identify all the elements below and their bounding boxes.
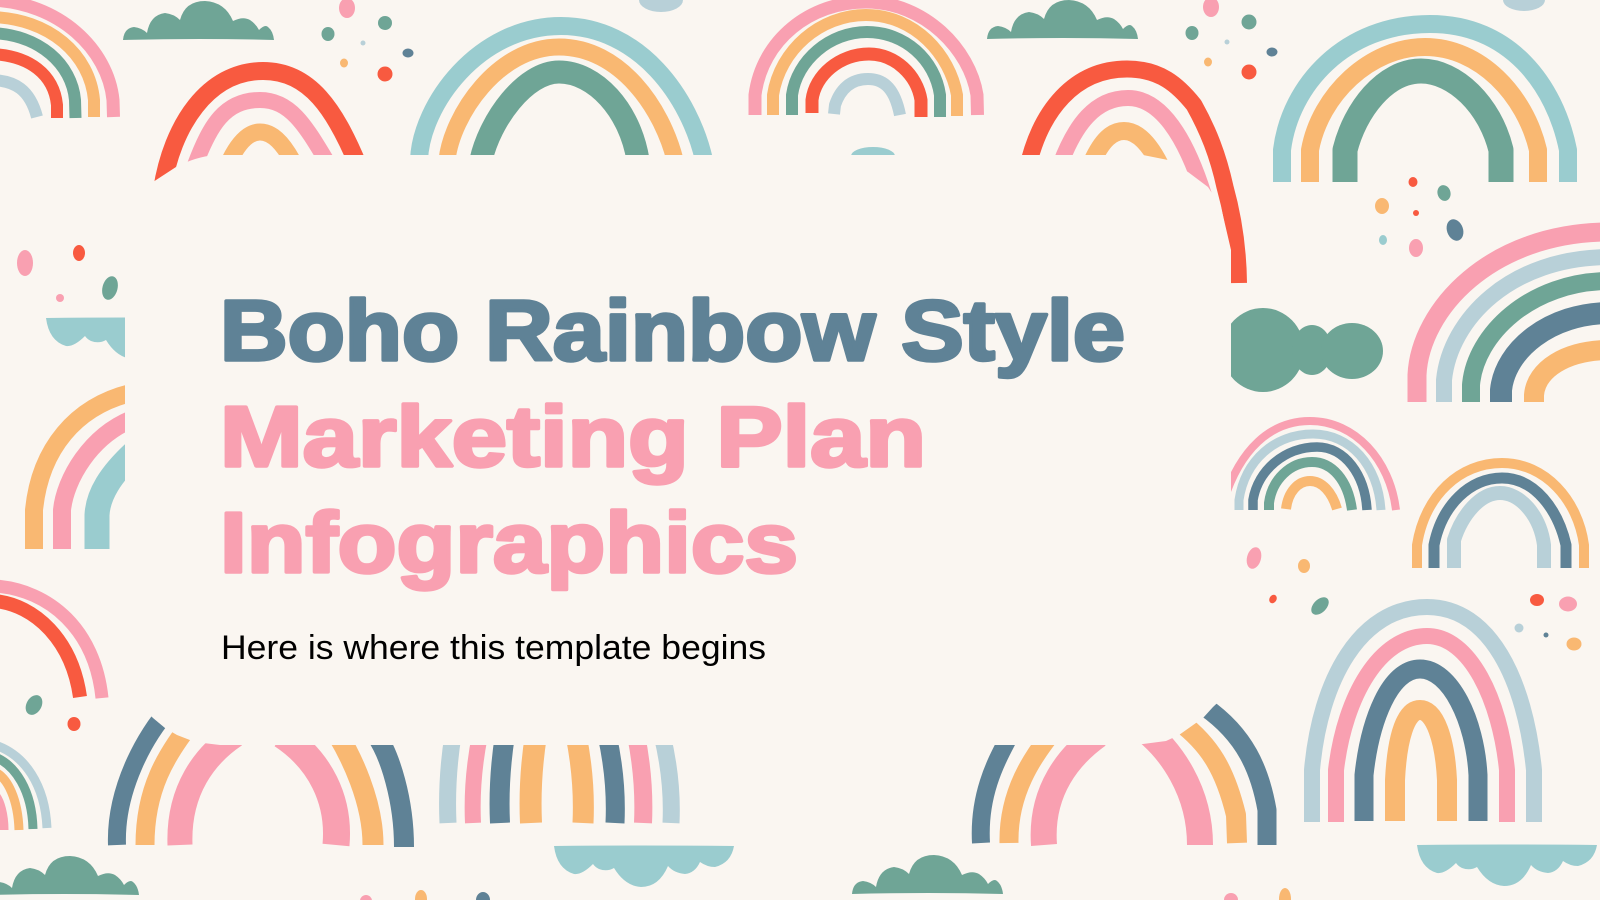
rainbow: orange blue pale right	[1417, 463, 1584, 568]
rainbow: red pink orange right	[1027, 69, 1238, 283]
title line 2: Marketing Plan	[220, 390, 926, 485]
dots: left cluster	[17, 245, 120, 302]
dots: right middle cluster	[1244, 546, 1582, 650]
icon: cloud top right	[987, 0, 1138, 39]
rainbow: red pink orange left	[162, 71, 358, 190]
rainbow: teal orange green top right	[1282, 24, 1568, 182]
rainbow: teal orange green top centre	[419, 26, 704, 160]
title line 3: Infographics	[220, 496, 798, 591]
title	[220, 284, 1125, 591]
rainbow: pink red lower left	[0, 586, 102, 698]
rainbow: large right edge	[1417, 232, 1600, 402]
rainbow: small five band right	[1224, 421, 1396, 510]
dots: right cluster under rainbow	[1375, 177, 1466, 257]
stripes: bottom centre rainbow legs	[448, 735, 671, 823]
dots: top left cluster	[322, 0, 683, 82]
rainbow: five band top middle	[755, 2, 978, 117]
icon: cloud top left	[123, 1, 274, 40]
rainbow: legs bottom centre right	[981, 707, 1267, 845]
icon: teal scallop bottom right	[1417, 844, 1597, 886]
icon: cloud bottom centre	[852, 855, 1003, 894]
rainbow: top-left corner	[0, 0, 114, 118]
icon: small teal arc	[851, 147, 895, 165]
icon: teal scallop left	[46, 318, 226, 359]
panel: central title area	[125, 155, 1231, 745]
dots: top right cluster	[1186, 0, 1545, 80]
rainbow: legs bottom left	[117, 708, 404, 847]
title line 1: Boho Rainbow Style	[220, 284, 1125, 379]
dots: bottom edge	[360, 888, 1291, 900]
rainbow: tall four band bottom right	[1312, 607, 1534, 822]
icon: teal scallop bottom centre	[554, 846, 734, 887]
icon: cloud bottom left	[0, 856, 139, 895]
rainbow: orange pink teal left	[34, 392, 135, 549]
rainbow: small bottom left corner	[0, 745, 47, 830]
icon: green cloud blob	[1222, 308, 1383, 392]
dots: lower left	[22, 692, 80, 731]
subtitle: Here is where this template begins	[221, 629, 766, 667]
